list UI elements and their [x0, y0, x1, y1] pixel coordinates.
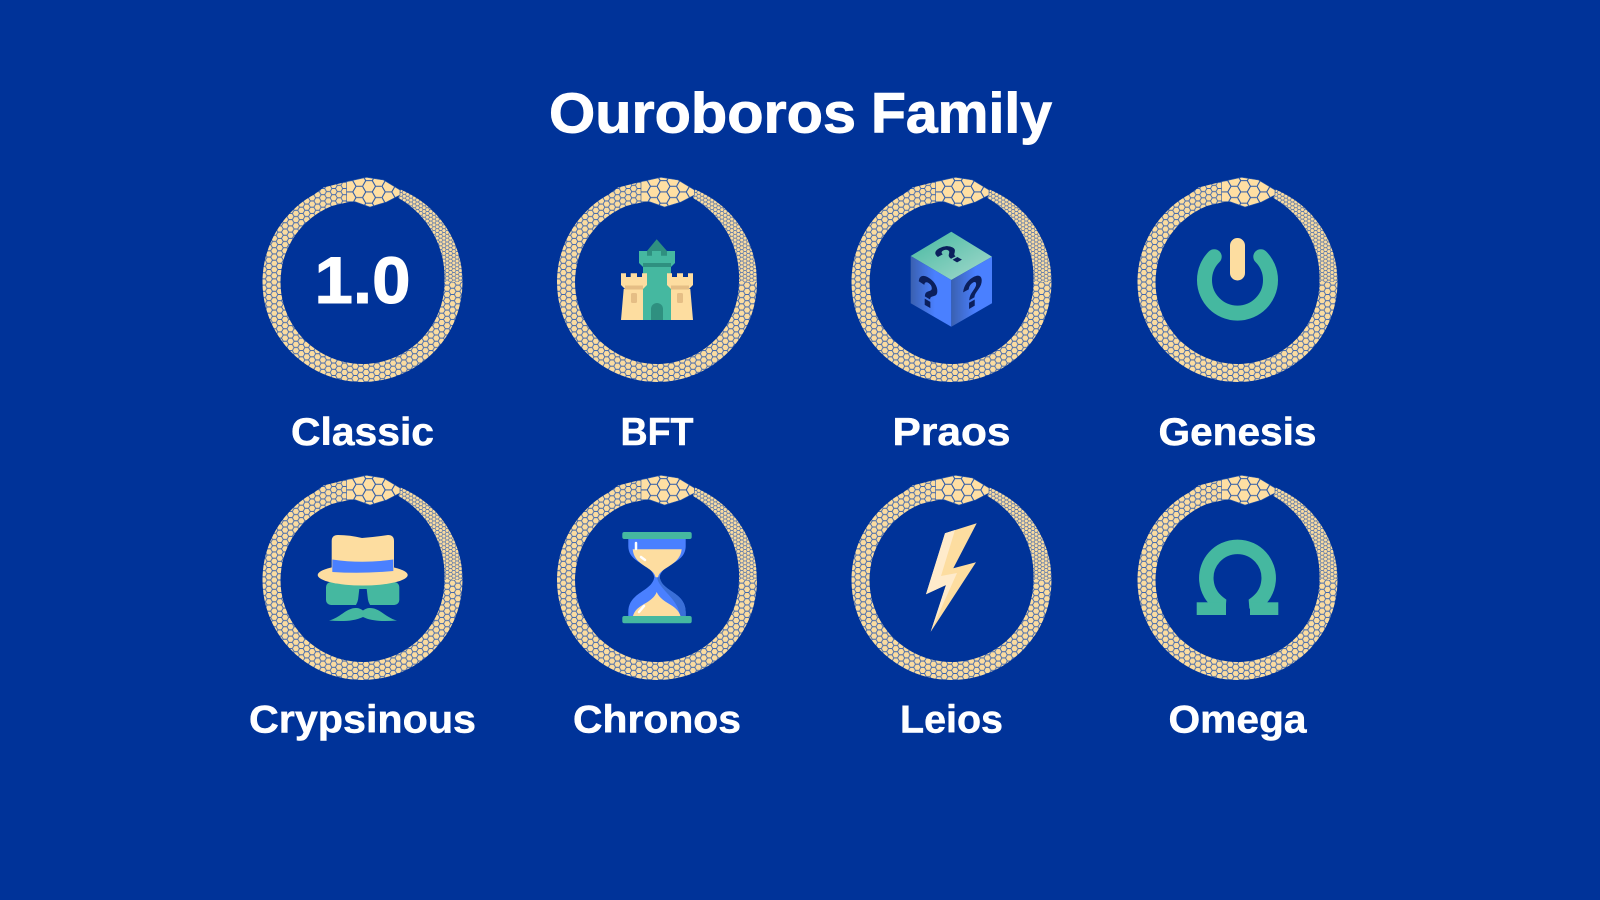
icon: 1.0: 1.0	[314, 243, 410, 317]
icon: question-mark cube: ?	[962, 263, 983, 322]
panel: Genesis	[1138, 177, 1338, 454]
panel: Leios	[852, 475, 1052, 742]
label: Classic: Classic	[291, 411, 434, 454]
icon: lightning bolt	[926, 523, 977, 632]
ouroboros ring: Leios	[852, 475, 1052, 680]
icon: disguised figure	[318, 535, 408, 621]
icon: question-mark cube: ?	[918, 263, 939, 322]
icon: hourglass	[622, 532, 692, 623]
title: Ouroboros	[549, 82, 856, 146]
icon: castle	[621, 239, 693, 320]
label: Praos: Praos	[892, 411, 1010, 454]
icon: omega symbol	[1197, 547, 1278, 615]
label: BFT: BFT	[620, 411, 694, 454]
panel: Praos	[852, 177, 1052, 454]
panel: Classic	[262, 177, 462, 454]
panel: BFT	[557, 177, 757, 454]
ouroboros ring: Omega	[1138, 475, 1338, 680]
label: Leios: Leios	[900, 699, 1003, 742]
ouroboros ring: Praos	[852, 177, 1052, 382]
icon: question-mark cube: ?	[925, 240, 976, 270]
label: Genesis: Genesis	[1158, 411, 1316, 454]
panel: Omega	[1138, 475, 1338, 742]
label: Crypsinous: Crypsinous	[249, 699, 476, 742]
icon: power button	[1205, 246, 1270, 313]
ouroboros ring: Crypsinous	[262, 475, 462, 680]
panel: Chronos	[557, 475, 757, 742]
title	[549, 82, 1052, 146]
ouroboros ring: Genesis	[1138, 177, 1338, 382]
title: Family	[871, 82, 1052, 146]
panel: Crypsinous	[249, 475, 476, 742]
ouroboros ring: Chronos	[557, 475, 757, 680]
ouroboros ring: Classic	[262, 177, 462, 382]
ouroboros ring: BFT	[557, 177, 757, 382]
label: Chronos: Chronos	[573, 699, 741, 742]
icon: question-mark cube	[911, 232, 992, 327]
label: Omega: Omega	[1168, 699, 1307, 742]
